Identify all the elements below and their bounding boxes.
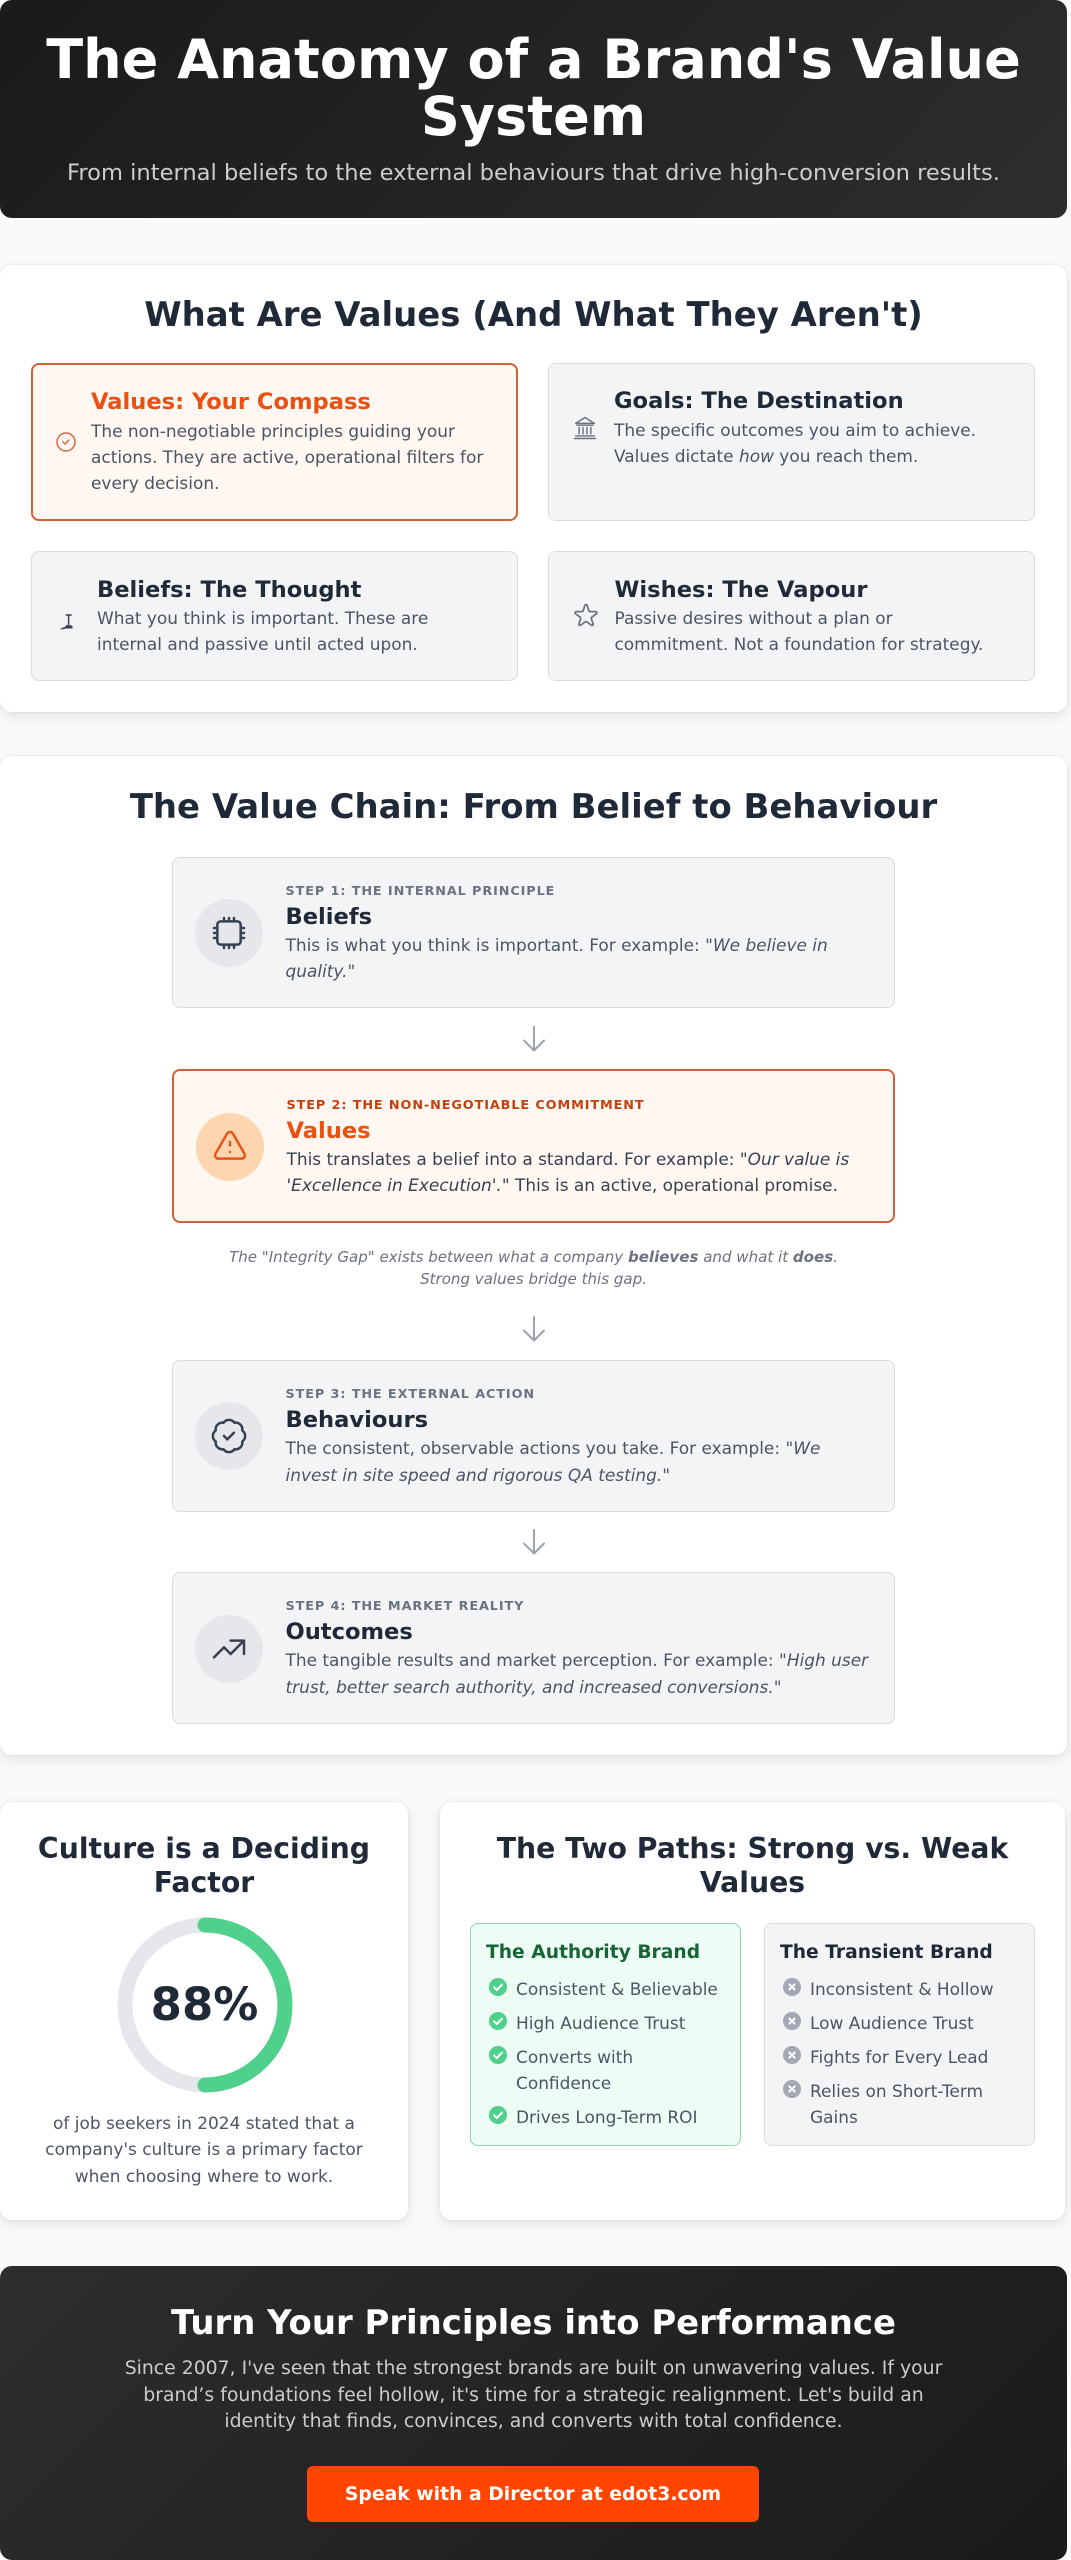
icon: bank	[574, 416, 596, 440]
card title: Beliefs: The Thought	[97, 577, 361, 603]
panel: two paths	[440, 1802, 1065, 2220]
stat value: 88%	[151, 1978, 258, 2031]
card text	[97, 608, 428, 654]
item: Converts with	[516, 2047, 633, 2067]
heading: culture: Culture is a Deciding	[38, 1832, 370, 1865]
cta text: Since 2007, I've seen that the strongest brands are built on unwavering values. If your	[125, 2358, 942, 2379]
card text: internal and passive until acted upon.	[97, 634, 418, 654]
heading: value chain: The Value Chain: From Belief to Behaviour	[130, 787, 937, 826]
stat caption: when choosing where to work.	[75, 2166, 333, 2186]
item: Confidence	[516, 2073, 611, 2093]
icon: chip	[195, 899, 263, 967]
item	[783, 2080, 983, 2127]
step text: This translates a belief into a standard. For example: "Our value is	[286, 1149, 849, 1169]
header banner	[0, 0, 1067, 218]
arrow	[523, 1316, 545, 1342]
panel: culture stat	[0, 1802, 408, 2220]
panel: value chain	[0, 756, 1067, 1755]
card text	[614, 608, 983, 654]
title: System	[421, 85, 646, 148]
arrow	[523, 1026, 545, 1052]
integrity gap note: The "Integrity Gap" exists between what a company believes and what it does.	[229, 1248, 838, 1266]
step 1: beliefs	[172, 857, 894, 1008]
step text: trust, better search authority, and increased conversions."	[286, 1677, 782, 1697]
step text: quality."	[286, 961, 355, 981]
card: beliefs	[31, 551, 518, 681]
card: authority brand	[470, 1923, 741, 2146]
step text: 'Excellence in Execution'." This is an active, operational promise.	[286, 1175, 838, 1195]
heading: culture	[38, 1832, 370, 1899]
card text: Passive desires without a plan or	[614, 608, 893, 628]
title: The Anatomy of a Brand's Value	[46, 28, 1021, 91]
integrity gap note	[229, 1248, 838, 1288]
step title: Outcomes	[286, 1619, 413, 1645]
panel: what are values	[0, 265, 1067, 712]
card text: every decision.	[91, 473, 219, 493]
item: High Audience Trust	[516, 2013, 685, 2033]
step title: Beliefs	[286, 904, 372, 930]
icon: small glyph	[60, 614, 72, 630]
step text: The tangible results and market perception. For example: "High user	[286, 1650, 868, 1670]
card text: Values dictate how you reach them.	[614, 446, 918, 466]
card text: What you think is important. These are	[97, 608, 428, 628]
card title: Values: Your Compass	[91, 389, 371, 415]
item: Inconsistent & Hollow	[810, 1979, 994, 1999]
item: Fights for Every Lead	[810, 2047, 988, 2067]
step title: Values	[286, 1118, 371, 1144]
step title: Behaviours	[286, 1407, 428, 1433]
item: Drives Long-Term ROI	[516, 2107, 697, 2127]
item: Consistent & Believable	[516, 1979, 718, 1999]
step label: STEP 3: THE EXTERNAL ACTION	[286, 1387, 535, 1402]
step label: STEP 2: THE NON-NEGOTIABLE COMMITMENT	[286, 1098, 645, 1113]
card text: The specific outcomes you aim to achieve.	[614, 420, 976, 440]
step text: The consistent, observable actions you take. For example: "We	[286, 1438, 820, 1458]
step text: This is what you think is important. For example: "We believe in	[286, 935, 828, 955]
icon: badge check	[195, 1402, 263, 1470]
heading: two paths: Values	[700, 1866, 805, 1899]
card text	[90, 421, 484, 493]
card title: Wishes: The Vapour	[614, 577, 867, 603]
card heading: The Authority Brand	[486, 1942, 700, 1962]
cta text: identity that finds, convinces, and converts with total confidence.	[224, 2411, 843, 2432]
cta heading: Turn Your Principles into Performance	[171, 2303, 896, 2342]
cta button	[307, 2466, 759, 2522]
item: Relies on Short-Term	[810, 2081, 983, 2101]
donut chart: 88%	[118, 1918, 292, 2092]
card: wishes	[548, 551, 1035, 681]
card: goals	[548, 363, 1035, 521]
heading: culture: Factor	[154, 1866, 254, 1899]
heading: two paths	[496, 1832, 1009, 1899]
integrity gap note: Strong values bridge this gap.	[420, 1270, 647, 1288]
cta text	[125, 2358, 942, 2432]
card heading: The Transient Brand	[780, 1942, 993, 1962]
step text	[285, 1650, 869, 1697]
stat caption: of job seekers in 2024 stated that a	[53, 2113, 355, 2133]
card text	[614, 420, 976, 466]
step text	[286, 1149, 849, 1195]
step 3: behaviours	[172, 1360, 894, 1512]
card text: The non-negotiable principles guiding your	[91, 421, 455, 441]
step label: STEP 4: THE MARKET REALITY	[286, 1599, 524, 1614]
heading: two paths: The Two Paths: Strong vs. Weak	[497, 1832, 1008, 1865]
step 4: outcomes	[172, 1572, 894, 1724]
card: transient brand	[764, 1923, 1035, 2146]
cta text: brand’s foundations feel hollow, it's time for a strategic realignment. Let's build an	[143, 2385, 924, 2406]
stat caption	[45, 2113, 363, 2186]
card title: Goals: The Destination	[614, 388, 904, 414]
item	[489, 2046, 633, 2093]
icon: warning triangle	[196, 1113, 264, 1181]
step text: invest in site speed and rigorous QA testing."	[286, 1465, 670, 1485]
card: values	[31, 363, 518, 521]
icon: check circle	[56, 432, 76, 452]
step 2: values	[172, 1069, 894, 1223]
step text	[285, 1438, 820, 1485]
icon: trending up	[195, 1614, 263, 1682]
step label: STEP 1: THE INTERNAL PRINCIPLE	[286, 884, 555, 899]
subtitle: From internal beliefs to the external behaviours that drive high-conversion results.	[67, 160, 1000, 186]
card text: commitment. Not a foundation for strategy.	[614, 634, 983, 654]
cta button: Speak with a Director at edot3.com	[345, 2484, 721, 2505]
title	[46, 28, 1021, 148]
arrow	[523, 1529, 545, 1554]
item: Low Audience Trust	[810, 2013, 974, 2033]
item: Gains	[810, 2107, 858, 2127]
icon: star	[574, 604, 598, 626]
card text: actions. They are active, operational filters for	[91, 447, 483, 467]
call to action panel	[0, 2266, 1067, 2560]
heading: what are values: What Are Values (And What They Aren't)	[144, 294, 923, 334]
step text	[285, 935, 828, 981]
stat caption: company's culture is a primary factor	[45, 2139, 363, 2159]
